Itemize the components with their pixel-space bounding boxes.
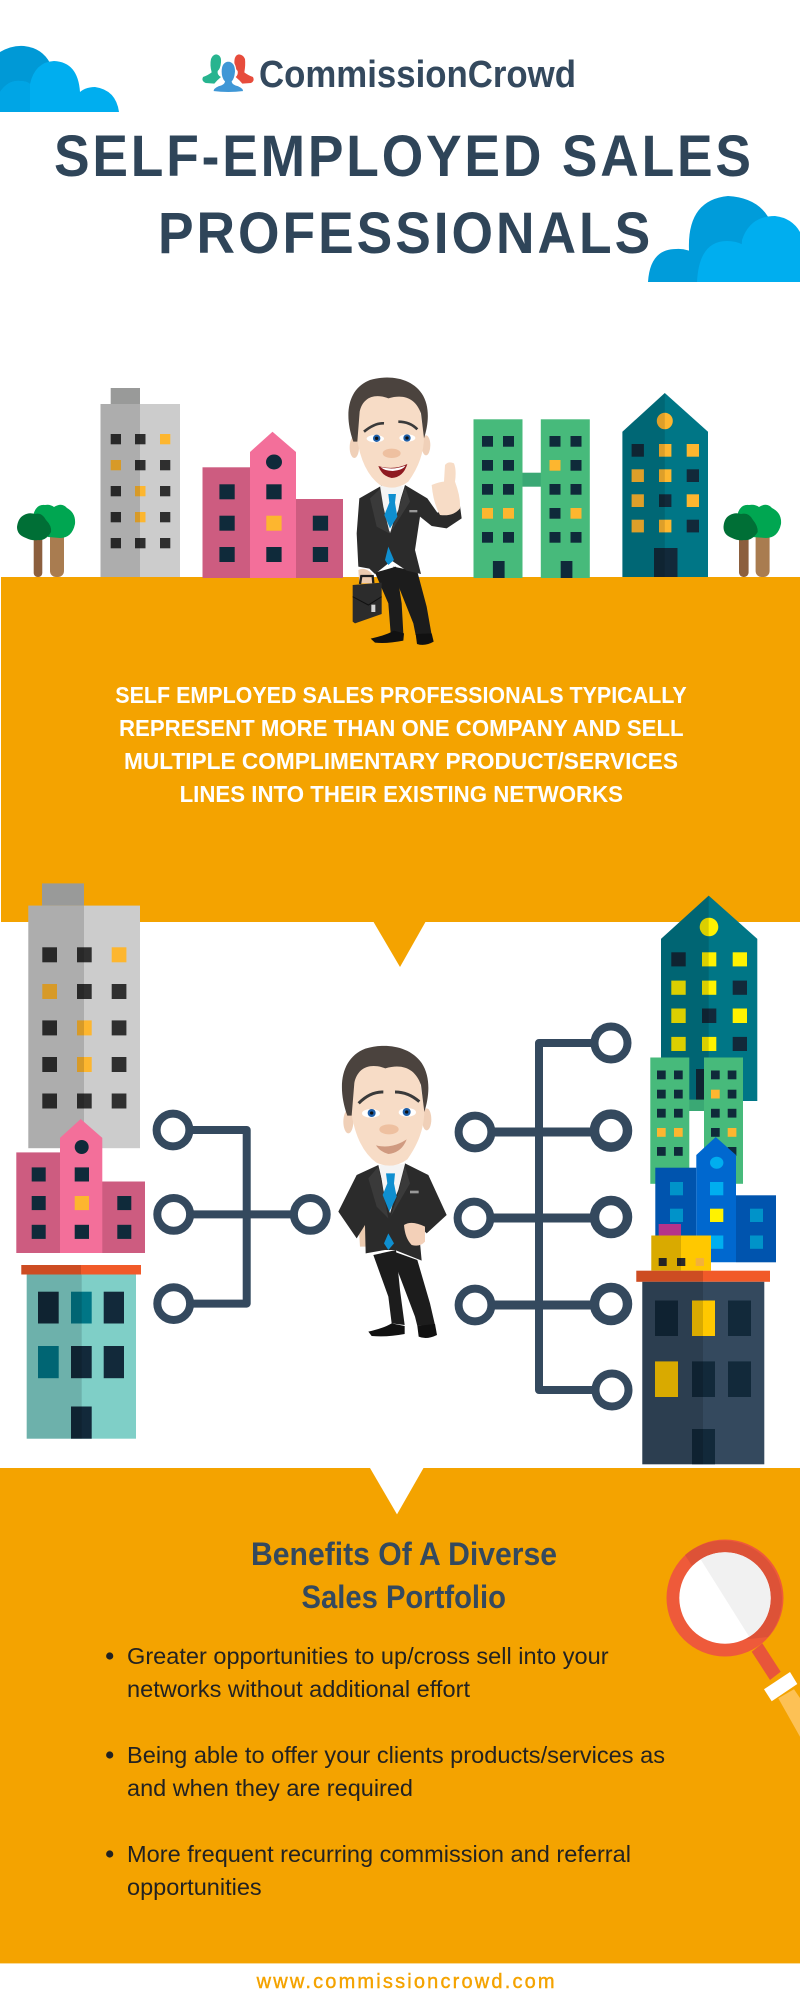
trousers: [373, 1250, 435, 1326]
panel text: intro paragraph: SELF EMPLOYED SALES PROFESSIONALS TYPICALLY: [115, 682, 687, 708]
bullet two: [106, 1742, 665, 1801]
fist: [404, 1223, 425, 1246]
thumbs up hand: [432, 462, 460, 515]
list: benefits bullets: [106, 1643, 665, 1900]
head: [343, 1110, 353, 1133]
bullet two: Being able to offer your clients products/services as: [127, 1742, 665, 1768]
icon: green twin towers small: [650, 1058, 743, 1184]
panel text: intro paragraph: MULTIPLE COMPLIMENTARY PRODUCT/SERVICES: [124, 748, 678, 774]
icon: cloud top left: [0, 46, 119, 112]
icon: green twin towers: [474, 419, 590, 578]
panel text: intro paragraph: [115, 682, 687, 807]
bullet three: More frequent recurring commission and referral: [127, 1841, 631, 1867]
logo wordmark: CommissionCrowd: [259, 54, 576, 96]
icon: pink building small: [16, 1119, 145, 1253]
bullet one: [106, 1643, 609, 1702]
heading: benefits: Sales Portfolio: [302, 1579, 506, 1615]
icon: three people logo mark: [202, 54, 254, 93]
chart: left network connector: [157, 1114, 327, 1320]
left hand and briefcase: [358, 569, 373, 583]
jacket: [357, 485, 462, 574]
illustration: businessman with thumbs up and briefcase: [348, 378, 462, 645]
bullet two: and when they are required: [127, 1775, 413, 1801]
icon: yellow rooftop block: [651, 1224, 711, 1271]
shirt and tie: [379, 1164, 405, 1212]
bullet one: Greater opportunities to up/cross sell into your: [127, 1643, 609, 1669]
title: [54, 124, 751, 265]
icon: blue building: [655, 1137, 776, 1262]
illustration: businessman with hands on hips: [338, 1046, 447, 1338]
footer url: www.commissioncrowd.com: [256, 1971, 555, 1993]
title: SELF-EMPLOYED SALES: [54, 124, 751, 188]
shirt and tie: [380, 486, 403, 532]
icon: cloud top right: [648, 196, 800, 282]
icon: mint office building: [21, 1265, 141, 1439]
icon: teal tower large: [661, 896, 757, 1101]
icon: pink building: [202, 432, 343, 578]
icon: navy office building: [636, 1271, 770, 1464]
icon: left trees: [17, 505, 75, 577]
icon: large grey tower: [28, 883, 140, 1148]
panel text: intro paragraph: REPRESENT MORE THAN ONE COMPANY AND SELL: [119, 715, 684, 741]
left hand: [359, 1223, 367, 1247]
shoes: [371, 631, 404, 643]
panel: orange intro band: [1, 577, 800, 967]
panel text: intro paragraph: LINES INTO THEIR EXISTING NETWORKS: [180, 781, 623, 807]
logo: [202, 54, 576, 96]
icon: teal tower: [622, 393, 708, 577]
heading: benefits: [251, 1536, 557, 1615]
title: PROFESSIONALS: [158, 201, 650, 265]
icon: right trees: [724, 505, 781, 577]
jacket: [338, 1163, 447, 1261]
bullet three: [106, 1841, 631, 1900]
heading: benefits: Benefits Of A Diverse: [251, 1536, 557, 1572]
shoes: [368, 1323, 405, 1336]
icon: magnifying glass: [666, 1540, 800, 1737]
head: [350, 437, 359, 458]
icon: grey tower: [100, 388, 180, 577]
bullet three: opportunities: [127, 1874, 262, 1900]
bullet one: networks without additional effort: [127, 1676, 471, 1702]
panel: benefits band: [0, 1468, 800, 1963]
trousers: [375, 567, 432, 635]
chart: right network connector: [458, 1026, 628, 1406]
